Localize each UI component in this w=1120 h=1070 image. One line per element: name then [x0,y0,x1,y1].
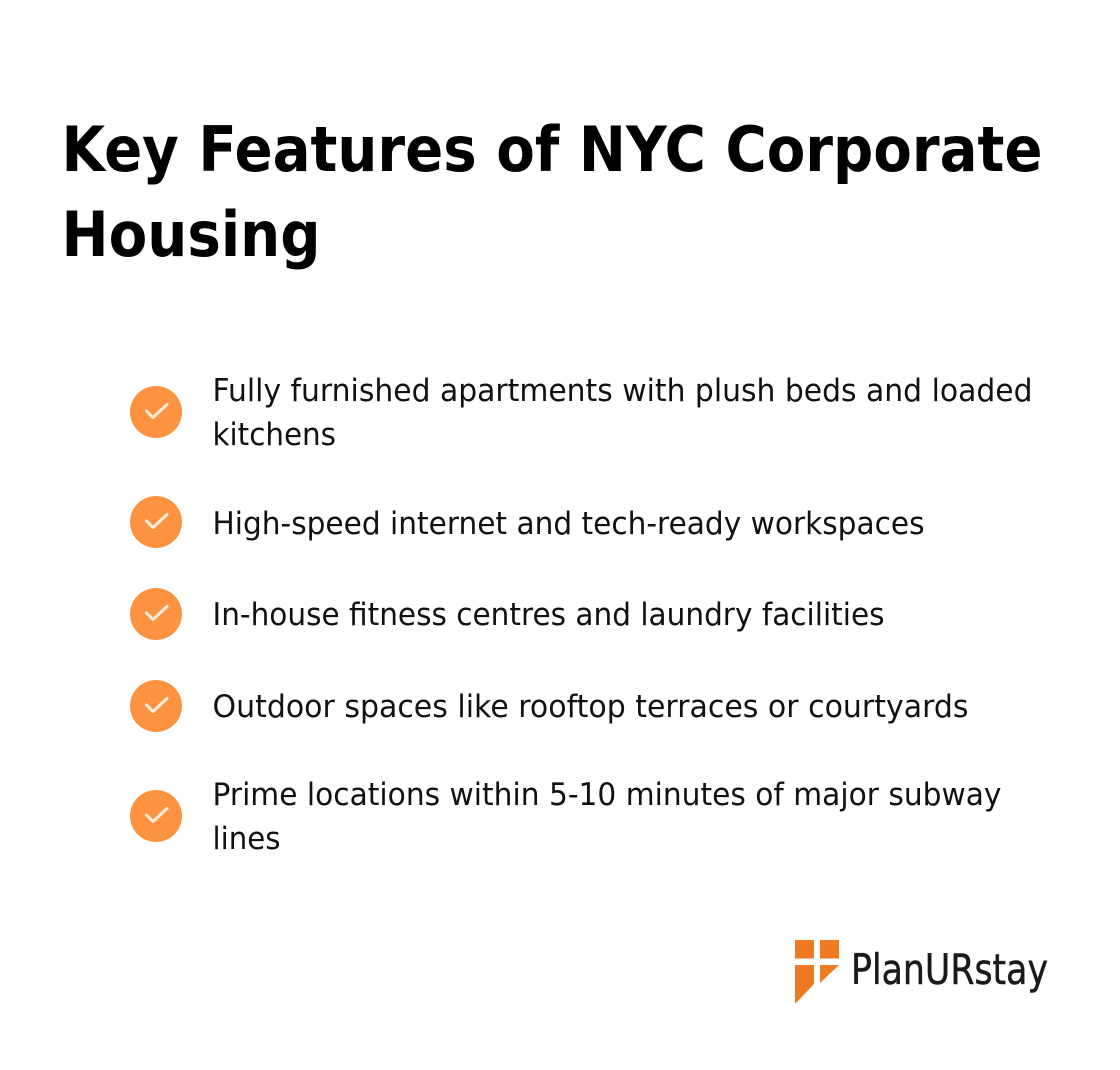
feature 2: internet: High-speed internet and tech-ready workspaces [212,506,924,542]
feature 1: furnished apartments: kitchens [212,417,336,453]
title [62,113,1042,271]
feature 3: fitness [130,588,884,640]
feature 3: fitness: In-house fitness centres and laundry facilities [212,597,884,633]
feature 1: furnished apartments: Fully furnished apartments with plush beds and loaded [212,373,1032,409]
title: Housing [62,198,320,271]
feature 5: prime locations: Prime locations within 5-10 minutes of major subway [212,777,1002,813]
icon: logo mark [795,940,839,1004]
feature 5: prime locations [130,777,1002,857]
title: Key Features of NYC Corporate [62,113,1042,186]
logo: PlanURstay: PlanURstay [851,945,1048,994]
feature 4: outdoor spaces [130,680,968,732]
feature 2: internet [130,496,924,548]
feature 5: prime locations: lines [212,821,280,857]
feature 4: outdoor spaces: Outdoor spaces like rooftop terraces or courtyards [212,689,968,725]
feature 1: furnished apartments [130,373,1032,453]
feature list [130,373,1032,857]
logo: PlanURstay [795,940,1048,1004]
